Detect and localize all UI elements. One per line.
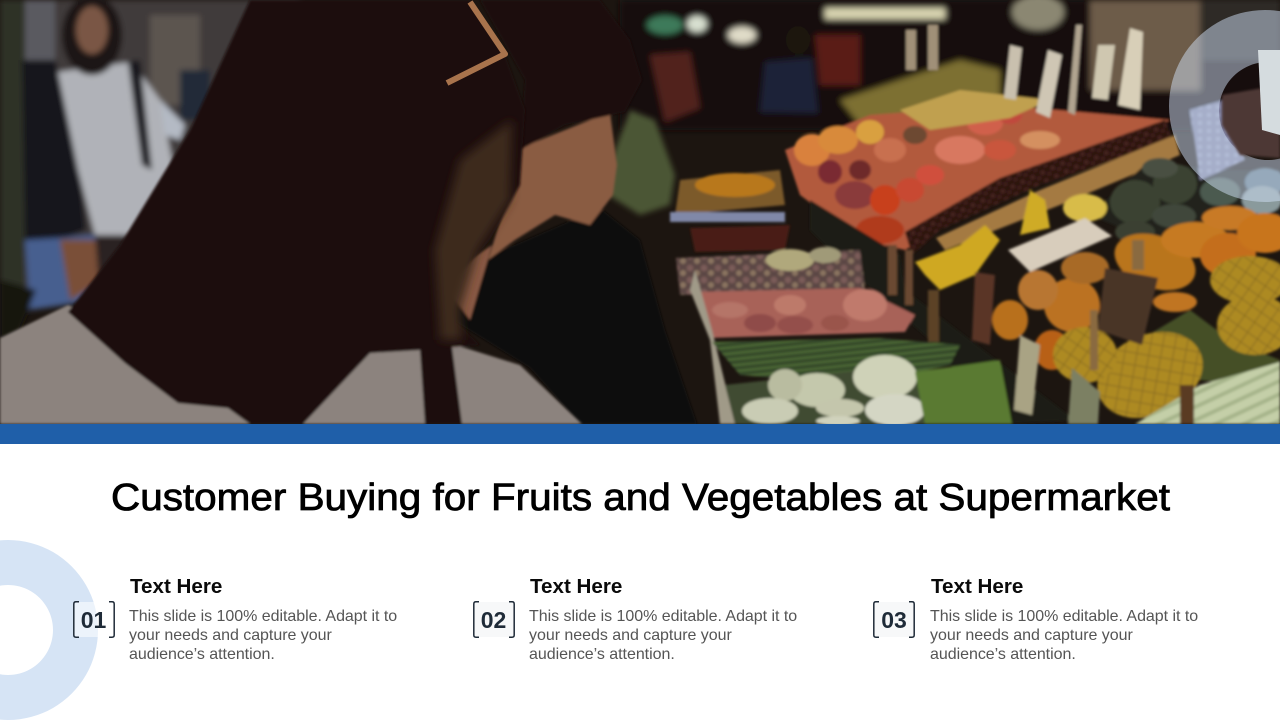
number badge 01	[73, 601, 115, 638]
blue divider bar	[0, 424, 1280, 444]
description 03: This slide is 100% editable. Adapt it to	[930, 608, 1198, 625]
dark crate front	[810, 200, 1075, 424]
hair highlight	[435, 120, 512, 340]
bananas	[915, 225, 1000, 290]
title: Customer Buying for Fruits and Vegetables at Supermarket	[111, 477, 1170, 519]
market ceiling and background	[620, 0, 1280, 150]
small tags	[1098, 268, 1158, 345]
heading 03: Text Here	[931, 575, 1023, 598]
long dark hair	[68, 0, 525, 424]
description 01: audience’s attention.	[129, 646, 275, 663]
pale striped produce	[1135, 362, 1280, 424]
green beans	[712, 338, 960, 385]
heading 02: Text Here	[530, 575, 622, 598]
dark fruit inside ring	[1222, 85, 1280, 158]
number badge 03	[873, 601, 915, 638]
description 01	[129, 608, 397, 663]
price signs	[1118, 28, 1143, 110]
item 03	[873, 575, 1198, 663]
description 02: audience’s attention.	[529, 646, 675, 663]
description 02: This slide is 100% editable. Adapt it to	[529, 608, 797, 625]
customer in black top	[440, 0, 697, 424]
item 02	[473, 575, 797, 663]
left produce stalls	[675, 170, 785, 215]
description 01: your needs and capture your	[129, 627, 332, 644]
main fruit pile	[785, 105, 1170, 250]
grey sweater	[0, 305, 582, 424]
number badge 02	[473, 601, 515, 638]
white sign	[1008, 218, 1112, 272]
melons	[1090, 160, 1280, 240]
description 02	[529, 608, 797, 663]
description 03	[930, 608, 1198, 663]
description 03: your needs and capture your	[930, 627, 1133, 644]
produce stalls	[620, 0, 1280, 434]
photo: customers buying produce at market	[0, 0, 1280, 424]
squash and pears	[1107, 223, 1203, 301]
pineapples	[1140, 310, 1280, 390]
number badge 01: 01	[81, 607, 106, 633]
customer with long hair and sweater	[0, 0, 582, 424]
white tag on ring	[1258, 50, 1280, 135]
white bulbs	[725, 370, 935, 424]
icon: sunglasses on head	[447, 2, 505, 83]
leafy greens	[915, 360, 1012, 424]
background shoppers	[0, 0, 300, 340]
green-jacket shopper	[600, 110, 675, 215]
heading 01: Text Here	[130, 575, 222, 598]
dark cherries band	[905, 120, 1172, 255]
number badge 02: 02	[481, 607, 506, 633]
decorative donut bottom left	[0, 540, 98, 720]
number badge 03: 03	[881, 607, 907, 633]
description 01: This slide is 100% editable. Adapt it to	[129, 608, 397, 625]
grapes behind ring	[1190, 100, 1245, 180]
wooden rail	[936, 135, 1180, 250]
decorative ring overlay on photo	[1169, 10, 1280, 202]
description 03: audience’s attention.	[930, 646, 1076, 663]
description 02: your needs and capture your	[529, 627, 732, 644]
item 01	[73, 575, 397, 663]
